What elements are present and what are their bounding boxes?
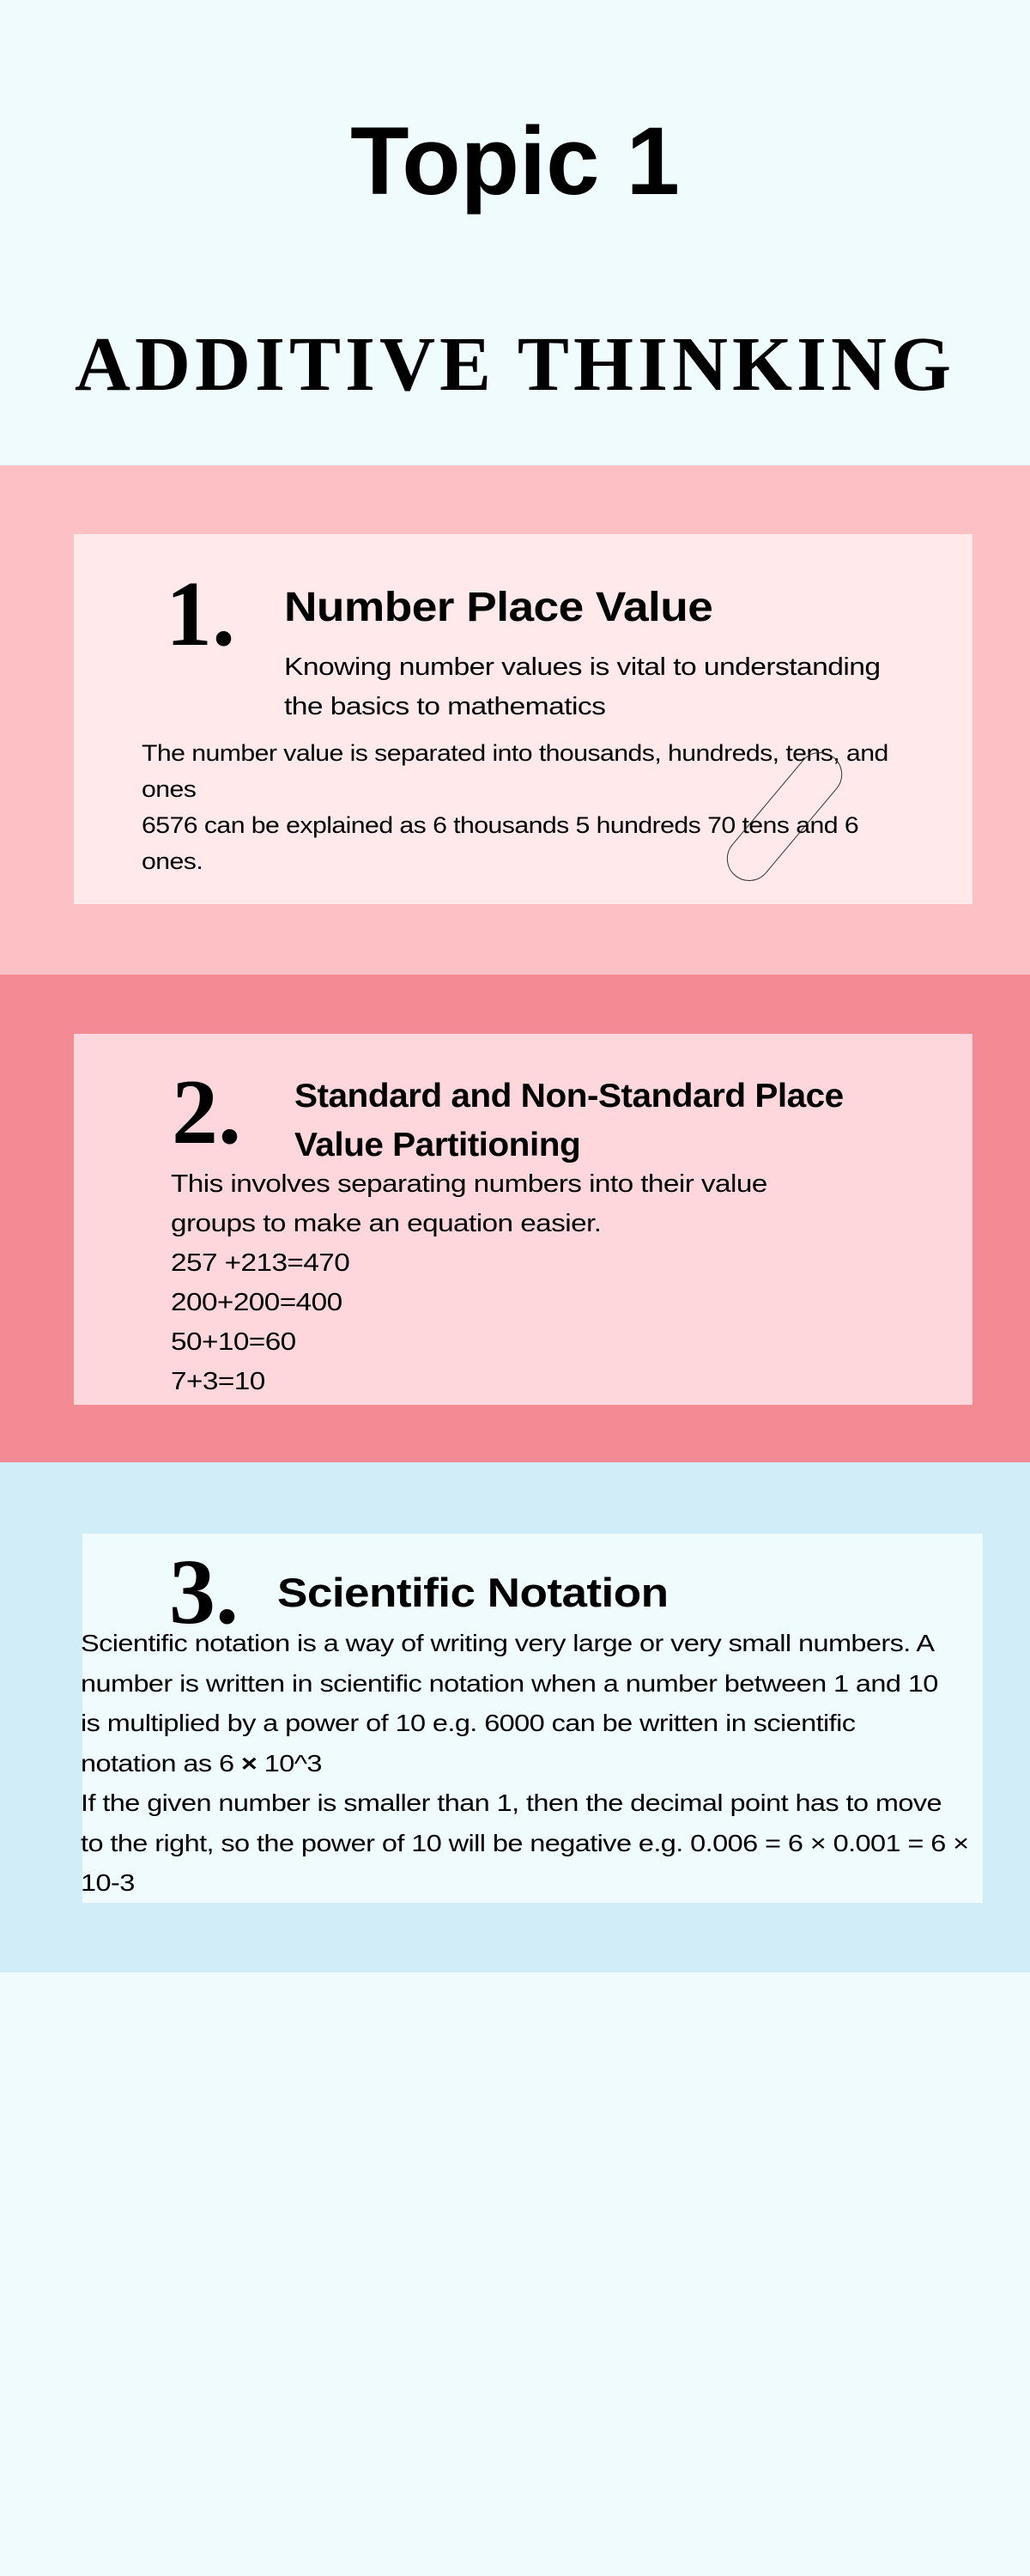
body text 1 — [142, 740, 888, 874]
body text 2: groups to make an equation easier. — [171, 1210, 601, 1237]
body text 3: is multiplied by a power of 10 e.g. 6000 can be written in scientific — [81, 1710, 855, 1736]
heading 3: Scientific Notation — [277, 1570, 668, 1615]
card 2 — [74, 1034, 972, 1405]
number 2: 2. — [172, 1061, 241, 1163]
body text 3: 10-3 — [81, 1869, 135, 1896]
icon: paperclip — [718, 743, 851, 890]
title: Topic 1 — [350, 107, 680, 215]
panel: section 1 band — [0, 465, 1030, 975]
body text 2: This involves separating numbers into their value — [171, 1170, 767, 1198]
card 3 — [82, 1534, 983, 1903]
body text 3: number is written in scientific notation when a number between 1 and 10 — [81, 1669, 938, 1697]
body text 2: 7+3=10 — [171, 1368, 265, 1395]
subtitle: ADDITIVE THINKING — [75, 322, 955, 407]
body text 2: 200+200=400 — [171, 1289, 342, 1316]
heading 2: Value Partitioning — [294, 1127, 580, 1163]
body text 2: 50+10=60 — [171, 1328, 296, 1356]
body text 1: ones. — [142, 848, 203, 874]
body text 3: to the right, so the power of 10 will be negative e.g. 0.006 = 6 × 0.001 = 6 × — [81, 1829, 969, 1856]
body text 3: notation as 6 × 10^3 — [81, 1750, 322, 1776]
body text 3 — [81, 1630, 969, 1896]
number 3: 3. — [169, 1541, 239, 1643]
intro text 1: Knowing number values is vital to understanding — [284, 653, 881, 681]
body text 3: Scientific notation is a way of writing very large or very small numbers. A — [81, 1630, 934, 1656]
heading 2: Standard and Non-Standard Place — [294, 1078, 844, 1115]
panel: section 3 band — [0, 1462, 1030, 1972]
intro text 1 — [284, 653, 881, 720]
intro text 1: the basics to mathematics — [284, 693, 605, 720]
body text 3: If the given number is smaller than 1, then the decimal point has to move — [81, 1789, 942, 1816]
heading 1: Number Place Value — [284, 585, 712, 630]
body text 1: 6576 can be explained as 6 thousands 5 hundreds 70 tens and 6 — [142, 812, 858, 838]
body text 1: The number value is separated into thousands, hundreds, tens, and — [142, 740, 888, 766]
body text 2: 257 +213=470 — [171, 1249, 349, 1277]
body text 1: ones — [142, 776, 196, 802]
heading 2 — [294, 1078, 844, 1163]
panel: section 2 band — [0, 975, 1030, 1462]
number 1: 1. — [166, 563, 235, 665]
body text 2 — [171, 1170, 767, 1395]
card 1 — [74, 534, 972, 904]
